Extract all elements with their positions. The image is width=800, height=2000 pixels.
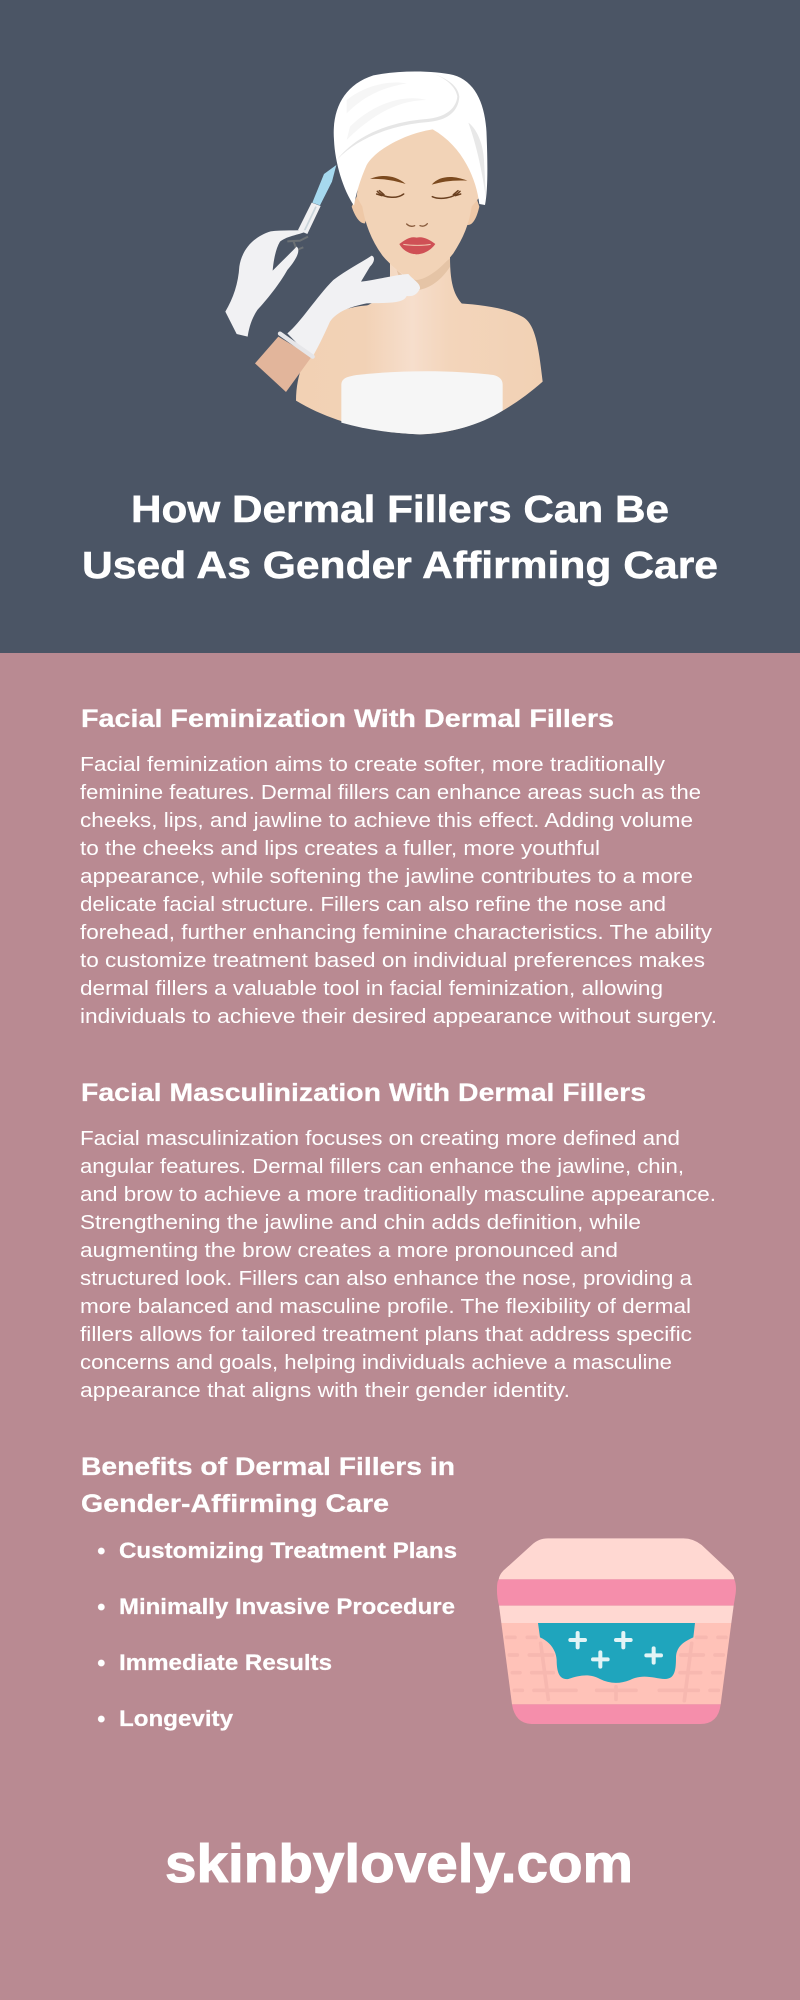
icon: cream jar [497, 1538, 736, 1724]
paragraph: facial feminization: delicate facial structure. Fillers can also refine the nose and [80, 894, 666, 916]
illustration: woman receiving filler injection [225, 72, 543, 434]
section: facial feminization [80, 705, 717, 1028]
title: How Dermal Fillers Can Be [131, 489, 669, 531]
jar neck [499, 1606, 734, 1623]
eyebrows [370, 176, 467, 185]
footer website: skinbylovely.com [165, 1834, 633, 1894]
title [82, 489, 718, 587]
benefits list: Immediate Results [119, 1650, 332, 1675]
paragraph: facial masculinization: more balanced and masculine profile. The flexibility of dermal [80, 1296, 691, 1318]
paragraph: facial feminization: to customize treatment based on individual preferences makes [80, 950, 705, 972]
shoulders [296, 303, 543, 434]
paragraph: facial feminization: feminine features. Dermal fillers can enhance areas such as the [80, 782, 701, 804]
closed eyes [377, 191, 461, 198]
neck [360, 257, 467, 308]
heading: facial masculinization: Facial Masculinization With Dermal Fillers [81, 1079, 646, 1107]
paragraph: facial masculinization: fillers allows for tailored treatment plans that address specific [80, 1324, 692, 1346]
paragraph: facial masculinization: augmenting the brow creates a more pronounced and [80, 1240, 618, 1262]
heading: benefits [81, 1453, 455, 1518]
lid band [497, 1579, 736, 1606]
jar base [512, 1704, 721, 1724]
paragraph: facial masculinization: Facial masculinization focuses on creating more defined and [80, 1128, 680, 1150]
towel on head [334, 72, 487, 206]
syringe [287, 165, 336, 250]
paragraph: facial masculinization: angular features. Dermal fillers can enhance the jawline, chin, [80, 1156, 684, 1178]
paragraph: facial feminization: individuals to achieve their desired appearance without surgery. [80, 1006, 717, 1028]
paragraph: facial feminization: Facial feminization aims to create softer, more traditionally [80, 754, 665, 776]
face [357, 125, 480, 280]
paragraph: facial masculinization: Strengthening the jawline and chin adds definition, while [80, 1212, 641, 1234]
paragraph: facial masculinization: concerns and goals, helping individuals achieve a masculine [80, 1352, 672, 1374]
plus signs [570, 1633, 661, 1667]
paragraph: facial masculinization [80, 1128, 716, 1402]
paragraph: facial masculinization: and brow to achieve a more traditionally masculine appearance. [80, 1184, 716, 1206]
paragraph: facial feminization: to the cheeks and lips creates a fuller, more youthful [80, 838, 600, 860]
benefits list: Longevity [119, 1706, 234, 1731]
strapless towel [341, 371, 503, 434]
ears [352, 197, 479, 225]
header panel [0, 0, 800, 653]
benefits list: Customizing Treatment Plans [119, 1538, 457, 1563]
paragraph: facial masculinization: appearance that aligns with their gender identity. [80, 1380, 570, 1402]
jar body [501, 1623, 731, 1704]
paragraph: facial feminization: dermal fillers a valuable tool in facial feminization, allowing [80, 978, 663, 1000]
paragraph: facial feminization: appearance, while softening the jawline contributes to a more [80, 866, 693, 888]
paragraph: facial feminization [80, 754, 717, 1028]
teal label [538, 1623, 695, 1683]
nose [407, 224, 427, 226]
title: Used As Gender Affirming Care [82, 545, 718, 587]
body panel [0, 653, 800, 2000]
section: benefits [81, 1453, 457, 1731]
paragraph: facial feminization: cheeks, lips, and jawline to achieve this effect. Adding volume [80, 810, 693, 832]
heading: facial feminization: Facial Feminization With Dermal Fillers [81, 705, 614, 733]
paragraph: facial feminization: forehead, further enhancing feminine characteristics. The ability [80, 922, 712, 944]
chin shadow [397, 258, 450, 290]
heading: benefits: Gender-Affirming Care [81, 1490, 389, 1518]
section: facial masculinization [80, 1079, 716, 1402]
paragraph: facial masculinization: structured look. Fillers can also enhance the nose, providing a [80, 1268, 693, 1290]
gloved hand on chin [280, 256, 420, 358]
heading: benefits: Benefits of Dermal Fillers in [81, 1453, 455, 1481]
benefits list [98, 1538, 457, 1731]
jar lid [499, 1538, 734, 1579]
benefits list: Minimally Invasive Procedure [119, 1594, 455, 1619]
lips [399, 237, 435, 254]
forearm [255, 337, 312, 392]
gloved hand holding syringe [225, 230, 309, 337]
